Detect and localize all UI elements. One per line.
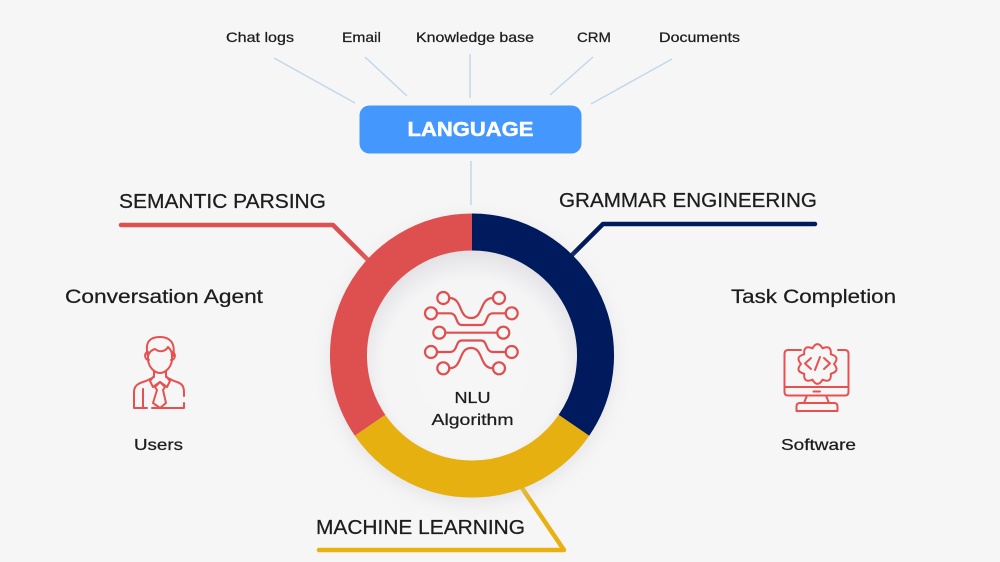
ring shadow xyxy=(331,220,613,502)
center label: NLU xyxy=(454,390,490,407)
center label: Algorithm xyxy=(432,412,514,429)
label: documents: Documents xyxy=(659,29,740,45)
heading and leader: grammar engineering: GRAMMAR ENGINEERING xyxy=(559,190,817,212)
label: users: Users xyxy=(134,437,183,454)
segment: machine learning xyxy=(370,425,574,479)
heading and leader: semantic parsing: SEMANTIC PARSING xyxy=(119,191,326,213)
heading: conversation agent: Conversation Agent xyxy=(65,287,264,308)
icon: user xyxy=(134,337,184,408)
heading: task completion: Task Completion xyxy=(731,287,896,308)
label: software: Software xyxy=(781,437,856,454)
heading and leader: semantic parsing xyxy=(119,191,368,260)
segment: grammar engineering xyxy=(472,232,596,425)
heading and leader: machine learning xyxy=(316,488,564,550)
inner disc xyxy=(366,250,578,462)
label: chat logs: Chat logs xyxy=(226,29,294,45)
icon: software xyxy=(784,344,848,411)
label: CRM: CRM xyxy=(577,29,611,45)
heading and leader: grammar engineering xyxy=(559,190,817,257)
language box xyxy=(360,106,582,154)
ring chart xyxy=(348,232,596,479)
language box: LANGUAGE xyxy=(408,119,534,141)
icon: NLU circuit xyxy=(425,292,518,374)
heading and leader: machine learning: MACHINE LEARNING xyxy=(316,517,525,539)
connector lines from sources to language xyxy=(274,54,672,205)
center label xyxy=(432,390,514,429)
segment: semantic parsing xyxy=(348,232,472,425)
label: knowledge base: Knowledge base xyxy=(416,29,534,45)
source labels xyxy=(226,29,740,45)
label: email: Email xyxy=(342,29,381,45)
